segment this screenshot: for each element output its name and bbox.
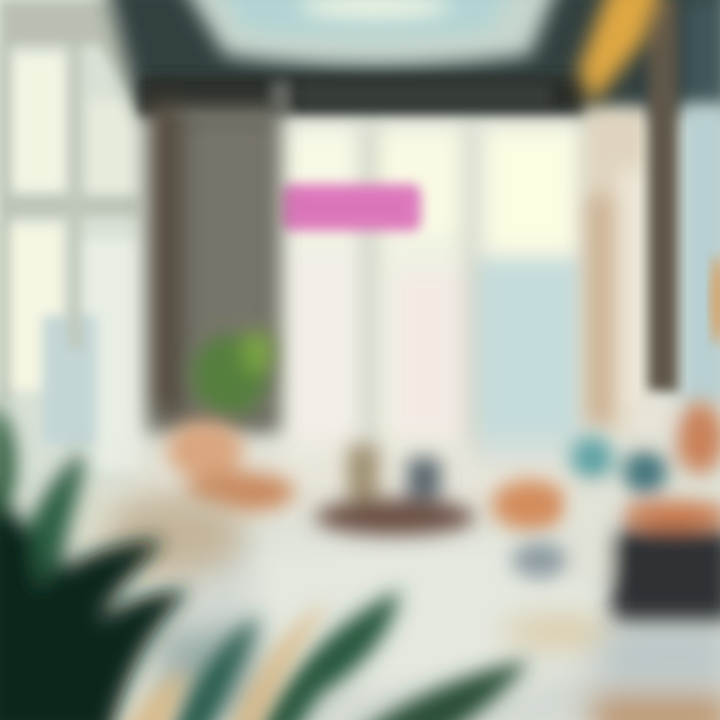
left foreground beige plant haze [59, 480, 260, 720]
green wall plant [192, 330, 273, 415]
beige leaf highlight [120, 600, 330, 720]
orange cushion centre right [492, 480, 568, 530]
floor and rug [180, 530, 720, 720]
foreground plant [0, 400, 530, 720]
left window [0, 0, 160, 490]
armchair left [167, 420, 295, 512]
coffee table and vases [315, 445, 475, 535]
yellow beam [578, 0, 665, 105]
dark column [648, 0, 678, 392]
ceiling [105, 0, 720, 112]
ceiling beam [140, 76, 585, 116]
skylight [180, 0, 560, 66]
right edge accent [711, 255, 720, 345]
right columns [585, 105, 720, 430]
dark curtain pillar [148, 100, 280, 435]
right sofa with cushions [512, 400, 720, 620]
centre window [282, 124, 580, 484]
lower wall glow [130, 445, 590, 515]
pink sign [280, 184, 421, 231]
